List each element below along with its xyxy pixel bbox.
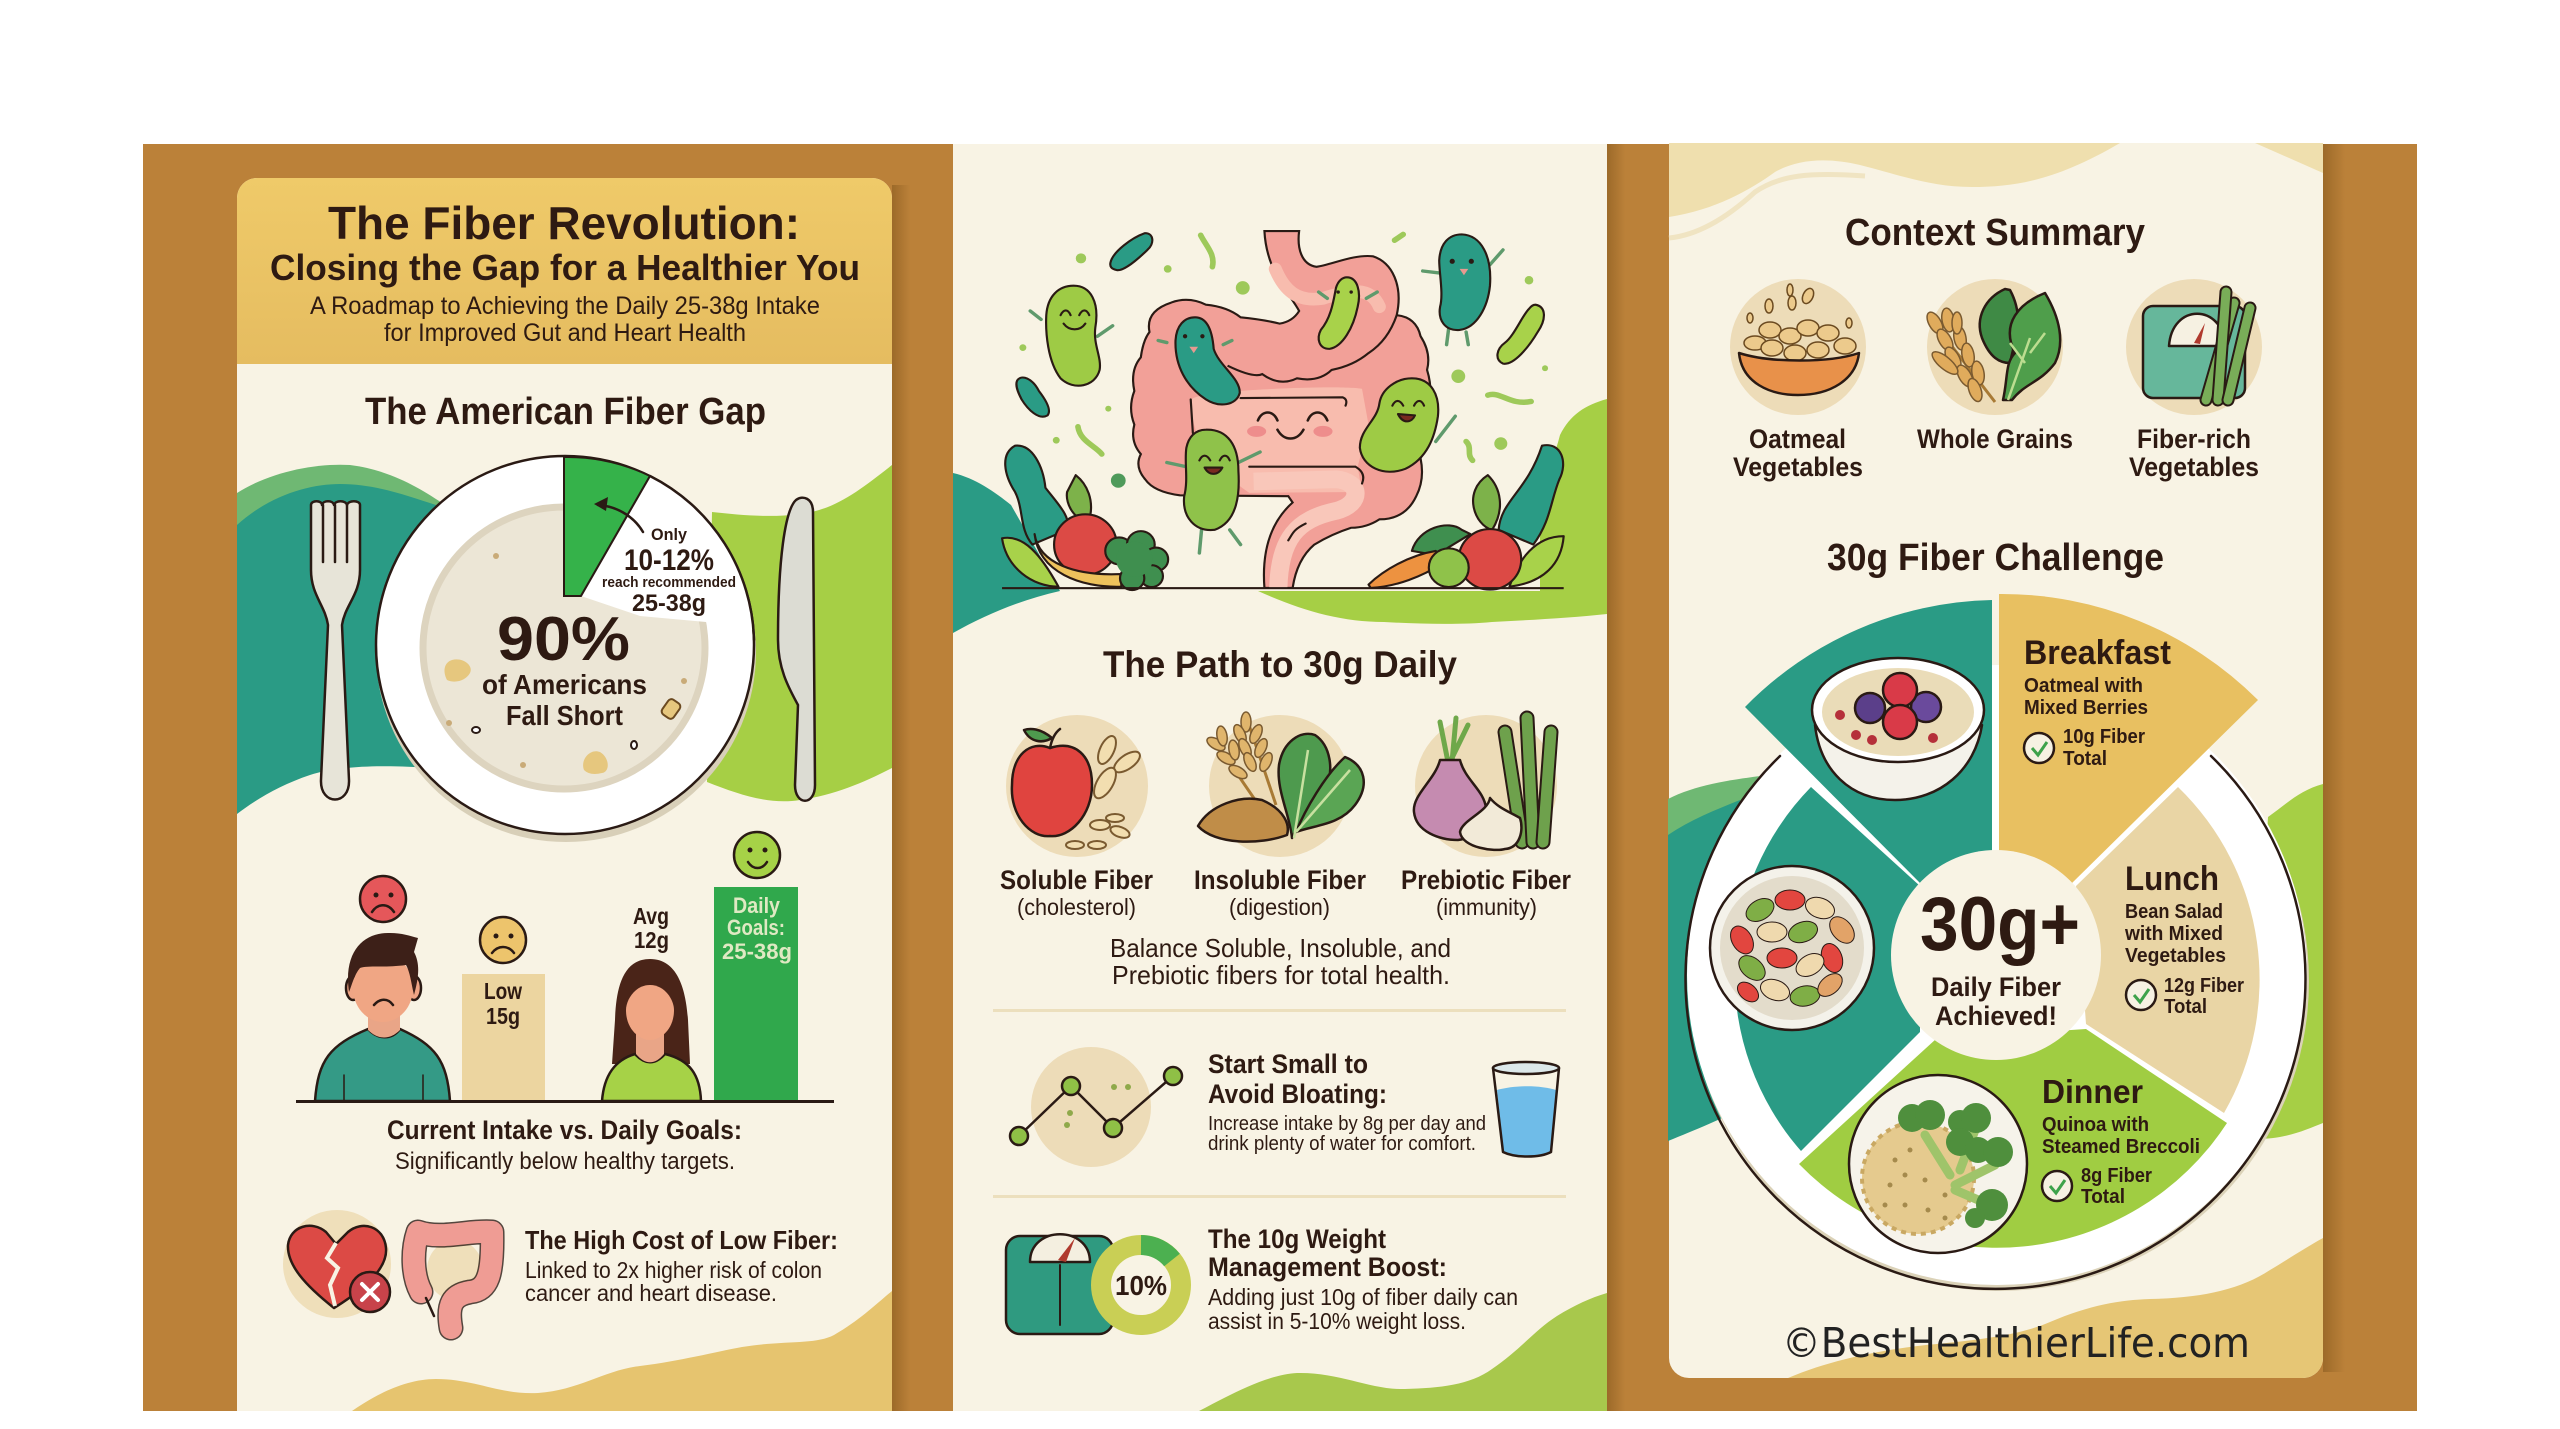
callout: only 10-12 percent: 25-38g bbox=[632, 590, 706, 617]
text: current intake vs daily goals: Current Intake vs. Daily Goals: bbox=[387, 1115, 742, 1145]
illustration: happy gut with microbes bbox=[1002, 231, 1564, 590]
segment: breakfast bbox=[1999, 594, 2258, 884]
segment: teal upper bbox=[1745, 600, 1992, 884]
fiber type labels: Prebiotic Fiber bbox=[1401, 865, 1571, 895]
donut: 10 percent: 10% bbox=[1115, 1270, 1167, 1301]
text: start small: Start Small to bbox=[1208, 1049, 1368, 1079]
side waves bbox=[1668, 776, 2323, 1141]
segment: lunch: Total bbox=[2164, 996, 2207, 1018]
fiber type labels: (cholesterol) bbox=[1017, 894, 1136, 920]
text: weight boost: assist in 5-10% weight loss. bbox=[1208, 1308, 1466, 1334]
segment: breakfast: 10g Fiber bbox=[2063, 726, 2145, 748]
text: start small: drink plenty of water for comfort. bbox=[1208, 1133, 1476, 1155]
callout: only 10-12 percent: reach recommended bbox=[602, 574, 736, 591]
segment: dinner: Total bbox=[2081, 1186, 2125, 1208]
icon: soluble fiber apple and oats bbox=[1006, 715, 1148, 857]
segment: lunch: Vegetables bbox=[2125, 945, 2226, 967]
segment: dinner: 8g Fiber bbox=[2081, 1165, 2152, 1187]
plate chart: 90 percent fall short bbox=[376, 456, 756, 842]
segment: dinner bbox=[1799, 1029, 2227, 1248]
stat: 90 percent: Fall Short bbox=[506, 700, 623, 731]
panel: context summary and fiber challenge bbox=[1668, 143, 2323, 1378]
segment: breakfast: Breakfast bbox=[2024, 634, 2171, 672]
stat: 90 percent bbox=[482, 605, 647, 731]
bottom wave bbox=[1788, 1238, 2323, 1378]
segment: lunch: with Mixed bbox=[2124, 923, 2223, 945]
bottom wave bbox=[352, 1291, 892, 1411]
text: weight boost: Adding just 10g of fiber daily can bbox=[1208, 1284, 1518, 1310]
donut: 10 percent bbox=[1101, 1245, 1181, 1325]
segment: breakfast: Oatmeal with bbox=[2024, 675, 2143, 697]
label: average 12g: 12g bbox=[634, 927, 669, 953]
icon: oatmeal bowl bbox=[1730, 279, 1866, 415]
header banner: The Fiber Revolution: bbox=[328, 197, 800, 249]
label: average 12g: Avg bbox=[633, 903, 669, 929]
segment: breakfast: Mixed Berries bbox=[2024, 697, 2148, 719]
bar: daily goals: Goals: bbox=[727, 915, 785, 940]
segment: lunch: Lunch bbox=[2125, 860, 2219, 898]
food labels: Whole Grains bbox=[1917, 424, 2073, 454]
background waves bbox=[237, 465, 892, 814]
icon: yellow sad face bbox=[480, 917, 526, 963]
intestine bbox=[1131, 231, 1430, 588]
icon: scale with 10 percent ring bbox=[1006, 1234, 1181, 1334]
header banner: Closing the Gap for a Healthier You bbox=[270, 247, 860, 288]
text: balance fibers bbox=[1110, 933, 1451, 990]
segment: dinner: Quinoa with bbox=[2042, 1114, 2149, 1136]
background waves bbox=[953, 399, 1607, 633]
text: balance fibers: Prebiotic fibers for total health. bbox=[1112, 960, 1450, 990]
floating dots and squiggles bbox=[1019, 234, 1548, 488]
segment: lunch: 12g Fiber bbox=[2164, 975, 2244, 997]
stat: 90 percent: of Americans bbox=[482, 669, 647, 700]
panel: the american fiber gap bbox=[237, 178, 892, 1411]
icon: red sad face bbox=[360, 876, 406, 922]
text: balance fibers: Balance Soluble, Insoluble, and bbox=[1110, 933, 1451, 963]
text: high cost of low fiber: cancer and heart disease. bbox=[525, 1280, 777, 1306]
fiber type labels: (digestion) bbox=[1229, 894, 1330, 920]
icon: knife bbox=[778, 498, 815, 801]
icon: insoluble fiber grains and greens bbox=[1198, 712, 1364, 857]
segment: lunch bbox=[2076, 787, 2260, 1113]
icon: colon bbox=[414, 1232, 492, 1328]
food labels: Oatmeal bbox=[1749, 424, 1846, 454]
icon: green happy face bbox=[734, 832, 780, 878]
heading: context summary: Context Summary bbox=[1845, 212, 2145, 254]
text: high cost of low fiber: The High Cost of Low Fiber: bbox=[525, 1225, 838, 1255]
watermark: ©BestHealthierLife.com bbox=[1782, 1319, 2250, 1367]
food: oatmeal bowl with berries bbox=[1812, 658, 1984, 800]
callout: only 10-12 percent bbox=[602, 525, 736, 617]
text: start small: Avoid Bloating: bbox=[1208, 1079, 1387, 1109]
arrow to slice bbox=[594, 497, 643, 532]
left vegetables bbox=[1002, 446, 1168, 590]
figure: man bbox=[315, 933, 450, 1101]
fiber type labels bbox=[1000, 865, 1571, 920]
center badge: 30g plus: Daily Fiber bbox=[1931, 972, 2061, 1002]
text: weight boost: The 10g Weight bbox=[1208, 1224, 1386, 1254]
text: weight boost: Management Boost: bbox=[1208, 1252, 1447, 1282]
heading: american fiber gap: The American Fiber Gap bbox=[365, 391, 766, 433]
icon: fiber-rich vegetables and scale bbox=[2126, 279, 2262, 415]
plate diagram: 30g fiber meals bbox=[1685, 594, 2309, 1291]
segment: lunch: Bean Salad bbox=[2125, 901, 2223, 923]
right vegetables bbox=[1369, 445, 1564, 590]
icon: broken heart bbox=[283, 1210, 391, 1318]
panel: the path to 30g daily bbox=[953, 144, 1607, 1411]
bar: daily goals: 25-38g bbox=[722, 939, 792, 964]
icon: glass of water bbox=[1493, 1062, 1559, 1156]
slice: 10-12 percent bbox=[564, 457, 650, 596]
brown background band bbox=[143, 144, 2417, 1411]
fiber type labels: Soluble Fiber bbox=[1000, 865, 1153, 895]
food: quinoa with broccoli bbox=[1849, 1075, 2027, 1253]
food labels bbox=[1733, 424, 2259, 482]
text: current intake vs daily goals: Significantly below healthy targets. bbox=[395, 1148, 735, 1175]
figure: woman bbox=[602, 959, 701, 1101]
bar: low 15g: Low bbox=[484, 978, 522, 1004]
bar: low 15g bbox=[462, 974, 545, 1101]
heading: path to 30g daily: The Path to 30g Daily bbox=[1103, 644, 1457, 685]
food labels: Vegetables bbox=[2129, 452, 2259, 482]
fiber type labels: Insoluble Fiber bbox=[1194, 865, 1366, 895]
food labels: Vegetables bbox=[1733, 452, 1863, 482]
bottom wave bbox=[1199, 1293, 1607, 1411]
callout: only 10-12 percent: Only bbox=[651, 525, 688, 544]
callout: only 10-12 percent: 10-12% bbox=[624, 544, 714, 577]
center badge: 30g plus bbox=[1891, 850, 2101, 1060]
icon: prebiotic fiber onion garlic asparagus bbox=[1414, 715, 1557, 857]
text: high cost of low fiber: Linked to 2x higher risk of colon bbox=[525, 1257, 822, 1283]
top wave bbox=[1669, 143, 2323, 238]
text: weight boost bbox=[1208, 1224, 1518, 1334]
text: start small: Increase intake by 8g per day and bbox=[1208, 1113, 1486, 1135]
center badge: 30g plus: Achieved! bbox=[1935, 1001, 2057, 1031]
segment: dinner: Dinner bbox=[2042, 1073, 2143, 1110]
header banner: for Improved Gut and Heart Health bbox=[384, 319, 746, 347]
chart: current intake versus goals bbox=[296, 832, 834, 1103]
bar: daily goals: Daily bbox=[733, 893, 781, 918]
fiber type labels: (immunity) bbox=[1436, 894, 1537, 920]
segment: breakfast: Total bbox=[2063, 748, 2107, 770]
header banner: A Roadmap to Achieving the Daily 25-38g Intake bbox=[310, 292, 820, 320]
text: current intake vs daily goals bbox=[387, 1115, 742, 1175]
text: high cost of low fiber bbox=[525, 1225, 838, 1306]
segment: teal left bbox=[1735, 787, 1920, 1151]
icon: fork bbox=[311, 501, 360, 800]
food: bean salad bbox=[1710, 866, 1874, 1030]
microbe characters bbox=[1016, 233, 1544, 553]
icon: gradual increase line chart bbox=[1010, 1047, 1182, 1167]
crumbs bbox=[445, 553, 687, 774]
icon: whole grains bbox=[1924, 279, 2063, 415]
header banner bbox=[237, 178, 892, 364]
food labels: Fiber-rich bbox=[2137, 424, 2251, 454]
heading: 30g fiber challenge: 30g Fiber Challenge bbox=[1827, 537, 2164, 579]
label: average 12g bbox=[633, 903, 669, 953]
bar: daily goals bbox=[714, 887, 798, 1101]
bar: low 15g: 15g bbox=[486, 1003, 520, 1029]
text: start small bbox=[1208, 1049, 1486, 1155]
segment: dinner: Steamed Breccoli bbox=[2042, 1136, 2200, 1158]
center badge: 30g plus: 30g+ bbox=[1920, 882, 2080, 967]
stat: 90 percent: 90% bbox=[497, 605, 630, 674]
